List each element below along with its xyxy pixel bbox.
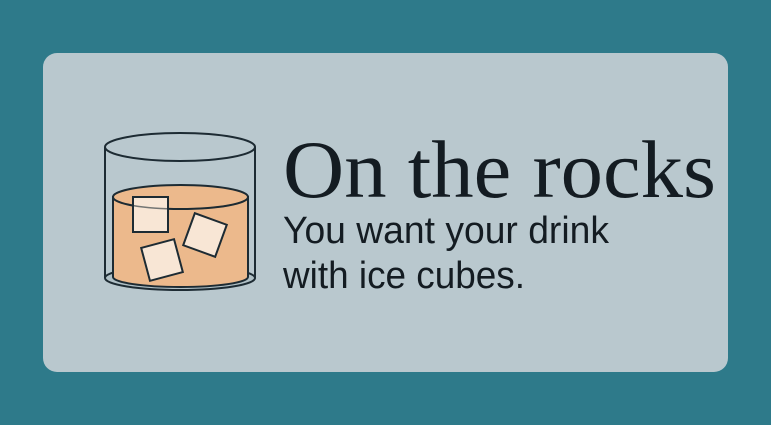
icon: glass with ice [105,133,255,290]
subtitle: You want your drink [283,210,610,252]
subtitle: with ice cubes. [282,255,525,297]
subtitle [282,210,610,297]
card panel [43,53,728,372]
title: On the rocks [283,124,716,215]
